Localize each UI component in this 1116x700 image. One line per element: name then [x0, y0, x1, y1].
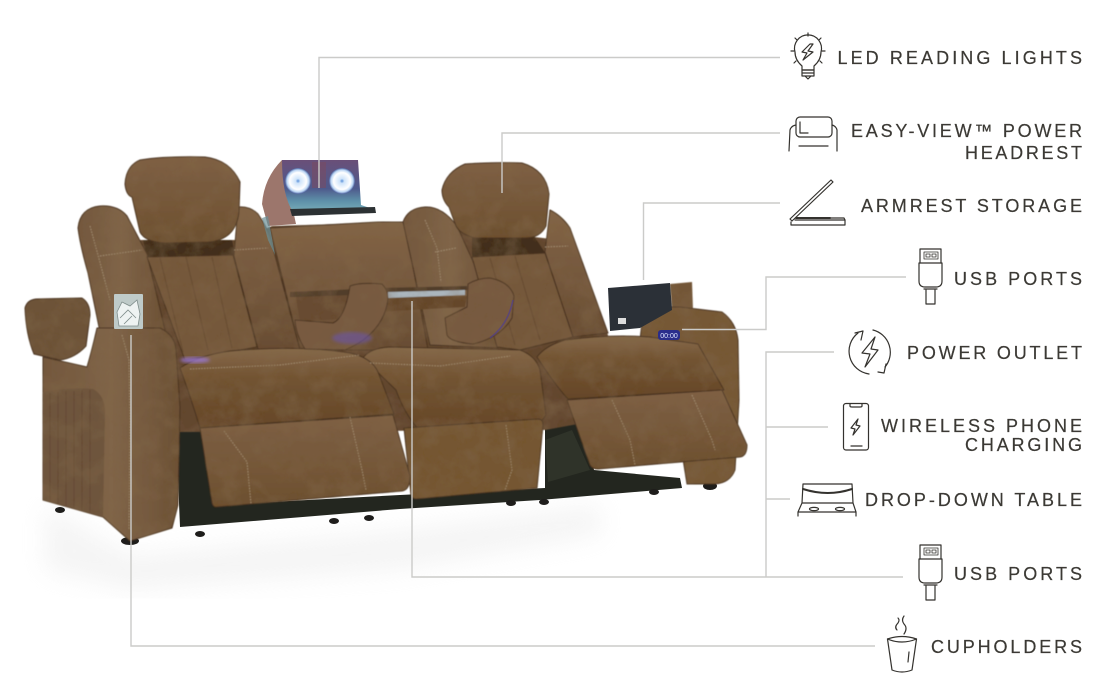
armrest USB display: [618, 318, 680, 340]
right seat back: [403, 207, 608, 350]
feature: USB ports (console): [919, 545, 1082, 600]
icon: USB plug: [919, 249, 942, 304]
icon: open armrest: [790, 180, 845, 225]
icon: smartphone: [844, 404, 868, 450]
icon: light bulb: [791, 33, 825, 79]
icon: table: [798, 484, 856, 516]
left arm: [43, 328, 180, 541]
label: USB PORTS: [954, 564, 1082, 584]
left headrest: [125, 157, 240, 243]
left seat cushion: [180, 348, 394, 428]
label continuation: phone charging: CHARGING: [965, 435, 1082, 455]
icon: headrest: [789, 117, 837, 151]
connector: upper USB ports: [682, 277, 906, 330]
center seat cushion: [363, 347, 546, 431]
icon: USB plug: [919, 545, 942, 600]
back silhouette: [100, 222, 608, 432]
LED reading light panel: [262, 160, 376, 226]
label: POWER OUTLET: [907, 343, 1082, 363]
connector: easy-view headrest: [502, 133, 780, 193]
feature: armrest storage: [790, 180, 1082, 225]
armrest USB display: 00:00: [660, 333, 678, 340]
sofa illustration: [25, 157, 747, 590]
glass with ice: [114, 294, 143, 329]
purple accent glow: [180, 216, 513, 363]
feature: easy-view power headrest: [789, 117, 1082, 151]
label: WIRELESS PHONE: [881, 416, 1082, 436]
left drop-down holder: [295, 283, 388, 350]
icon: steaming cup: [888, 616, 916, 672]
feature: power outlet: [849, 330, 1082, 374]
label: EASY-VIEW™ POWER: [851, 121, 1082, 141]
connector: cupholders: [131, 335, 875, 646]
right footrest: [567, 390, 747, 469]
right seat cushion: [537, 336, 724, 399]
feature: cupholders: [888, 616, 1082, 672]
icon: power cycle bolt: [849, 330, 890, 374]
feature: LED reading lights: [791, 33, 1082, 79]
left footrest: [200, 415, 410, 507]
connector: power outlet, phone charging, table and USB trunk: [412, 301, 903, 577]
center back cushion: [270, 222, 428, 350]
left seat back: [78, 206, 300, 360]
right drop-down holder: [445, 278, 514, 344]
right headrest: [442, 163, 549, 238]
reclining mechanism base: [55, 412, 717, 545]
label: USB PORTS: [954, 269, 1082, 289]
label: LED READING LIGHTS: [838, 48, 1082, 68]
armrest storage compartment: [608, 283, 672, 331]
label: CUPHOLDERS: [931, 637, 1082, 657]
connector: LED reading lights: [319, 58, 780, 188]
feature: USB ports (arm): [919, 249, 1082, 304]
right arm with lid: [640, 282, 739, 484]
connector: armrest storage: [644, 203, 780, 280]
label: ARMREST STORAGE: [861, 196, 1082, 216]
left armrest tray: [25, 298, 90, 360]
label continuation: headrest: HEADREST: [965, 143, 1082, 163]
feature: drop-down table: [798, 484, 1082, 516]
label: DROP-DOWN TABLE: [865, 490, 1082, 510]
table tray: [290, 286, 467, 322]
sofa upholstery: [25, 157, 747, 541]
feature: wireless phone charging: [844, 404, 1082, 450]
center footrest: [404, 419, 543, 499]
